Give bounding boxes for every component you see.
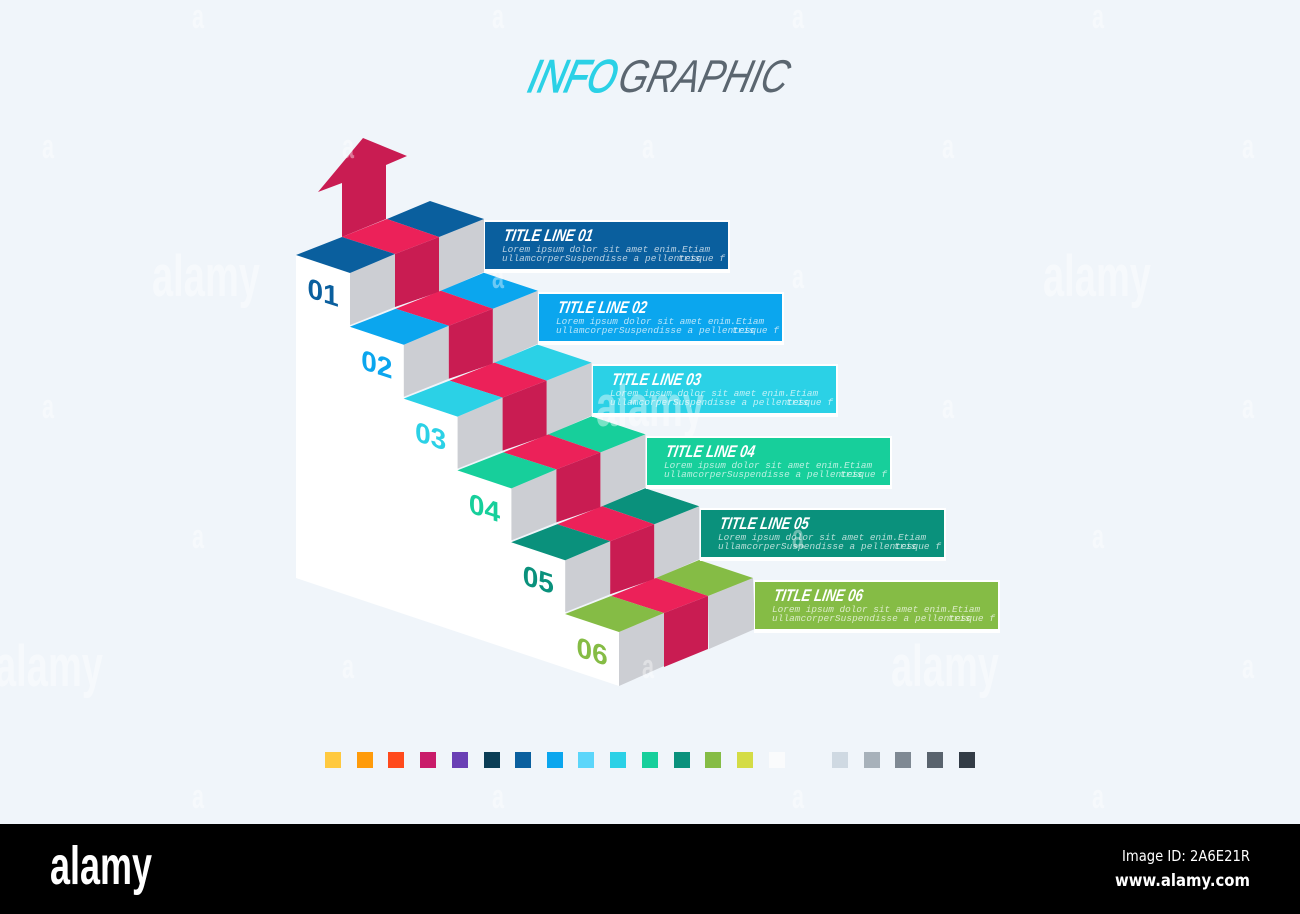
footer bar: Image ID: 2A6E21R	[1122, 847, 1250, 865]
panel: title line 02: TITLE LINE 02	[556, 297, 649, 317]
watermarks: a	[342, 648, 355, 686]
watermarks: a	[792, 258, 805, 296]
watermarks: a	[342, 388, 355, 426]
panel: title line 06	[754, 580, 1000, 633]
watermarks: alamy	[891, 634, 999, 699]
colour palette	[325, 752, 975, 768]
watermarks: a	[192, 778, 205, 816]
panel: title line 05: tris	[894, 541, 917, 552]
watermarks: a	[792, 518, 805, 556]
watermarks: alamy	[1043, 244, 1151, 309]
panel: title line 03	[592, 364, 838, 417]
number 05: 05	[523, 560, 554, 601]
watermarks: a	[942, 388, 955, 426]
watermarks: a	[642, 128, 655, 166]
watermarks: a	[192, 518, 205, 556]
title: INFO	[524, 51, 623, 102]
step 06 blocks	[565, 560, 755, 686]
panel: title line 01: TITLE LINE 01	[502, 225, 595, 245]
panel: title line 01: ullamcorperSuspendisse a pellentesque f	[502, 253, 725, 264]
panel: title line 03: tris	[786, 397, 809, 408]
number 03: 03	[415, 416, 446, 458]
panel: title line 06: TITLE LINE 06	[772, 585, 865, 605]
watermarks: alamy	[152, 244, 260, 309]
icon: upward arrow	[318, 138, 407, 237]
panel: title line 02: ullamcorperSuspendisse a pellentesque f	[556, 325, 779, 336]
panel: title line 04: Lorem ipsum dolor sit amet enim.Etiam	[664, 460, 873, 471]
panel: title line 05: Lorem ipsum dolor sit amet enim.Etiam	[718, 532, 927, 543]
panel: title line 04: ullamcorperSuspendisse a pellentesque f	[664, 469, 887, 480]
number 06: 06	[576, 632, 608, 673]
panel: title line 04	[646, 436, 892, 489]
panel: title line 03: ullamcorperSuspendisse a pellentesque f	[610, 397, 833, 408]
step 04 blocks	[457, 416, 645, 540]
number 04: 04	[469, 488, 500, 529]
panel: title line 04: tris	[840, 469, 863, 480]
footer bar: www.alamy.com	[1115, 871, 1250, 891]
panel: title line 02: Lorem ipsum dolor sit amet enim.Etiam	[556, 316, 765, 327]
panel: title line 03: TITLE LINE 03	[610, 369, 703, 389]
step 05 blocks	[511, 488, 699, 612]
number 01: 01	[308, 273, 339, 314]
panel: title line 03: Lorem ipsum dolor sit amet enim.Etiam	[610, 388, 819, 399]
panel: title line 01	[484, 220, 730, 273]
watermarks: a	[42, 128, 55, 166]
panel: title line 05: TITLE LINE 05	[718, 513, 811, 533]
title: GRAPHIC	[614, 51, 796, 102]
footer bar	[0, 824, 1300, 914]
watermarks: a	[1242, 648, 1255, 686]
panel: title line 02: tris	[732, 325, 755, 336]
step 03 blocks	[404, 345, 592, 469]
watermarks: a	[42, 388, 55, 426]
number 02: 02	[361, 344, 392, 386]
watermarks: a	[492, 778, 505, 816]
staircase white side wall	[296, 255, 619, 686]
panel: title line 05: ullamcorperSuspendisse a pellentesque f	[718, 541, 941, 552]
panel: title line 01: Lorem ipsum dolor sit amet enim.Etiam	[502, 244, 711, 255]
footer bar: alamy	[50, 836, 152, 896]
step 01 blocks	[296, 201, 484, 325]
panel: title line 01: tris	[678, 253, 701, 264]
step 02 blocks	[350, 273, 538, 397]
panel: title line 05	[700, 508, 946, 561]
panel: title line 06: tris	[948, 613, 971, 624]
title	[524, 51, 796, 102]
watermarks: a	[1092, 518, 1105, 556]
watermarks: a	[492, 518, 505, 556]
panel: title line 02	[538, 292, 784, 345]
panel: title line 06: Lorem ipsum dolor sit amet enim.Etiam	[772, 604, 981, 615]
watermarks: a	[1092, 778, 1105, 816]
watermarks: a	[1242, 128, 1255, 166]
panel: title line 04: TITLE LINE 04	[664, 441, 757, 461]
watermarks: alamy	[596, 374, 704, 439]
watermarks: a	[1242, 388, 1255, 426]
watermarks: a	[492, 258, 505, 296]
panel: title line 06: ullamcorperSuspendisse a pellentesque f	[772, 613, 995, 624]
watermarks: a	[342, 128, 355, 166]
watermarks: a	[792, 778, 805, 816]
watermarks: a	[942, 128, 955, 166]
watermarks: a	[642, 648, 655, 686]
